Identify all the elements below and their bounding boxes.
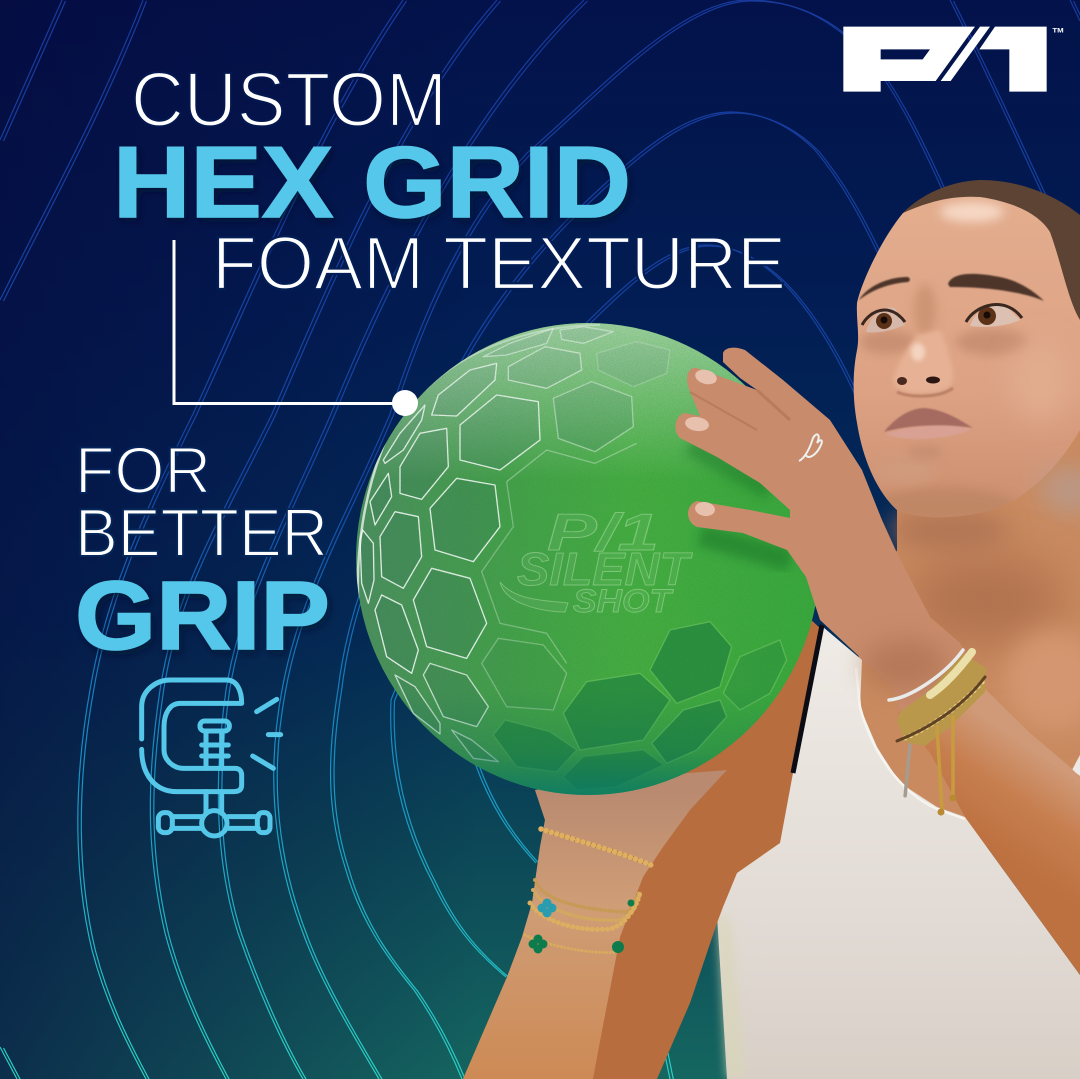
ball: embossed logo text: SHOT [573, 583, 674, 619]
ring [799, 434, 822, 461]
left eyebrow [859, 277, 910, 300]
clover charms [528, 898, 634, 954]
person: tank top [700, 627, 1080, 1079]
right eye [966, 304, 1022, 327]
person: torso and neck [850, 400, 1080, 860]
ball: Silent Shot hex grid foam ball [356, 323, 820, 795]
person: supporting arm [463, 600, 822, 1079]
bracelets on left wrist [525, 829, 651, 954]
title: custom hex grid foam texture [113, 57, 786, 305]
logo: P/1 [843, 27, 1064, 92]
ball: embossed logo text [500, 504, 693, 619]
title line: FOAM TEXTURE: FOAM TEXTURE [212, 221, 786, 305]
person: head and hair [854, 180, 1080, 523]
left eye [862, 307, 905, 333]
lips [884, 408, 973, 439]
connector end dot [392, 390, 418, 416]
icon: clamp [142, 680, 281, 836]
connector line to ball [174, 240, 395, 404]
fingernails [684, 367, 718, 517]
ball: embossed logo text: P/1 [547, 504, 659, 562]
title line: HEX GRID: HEX GRID [113, 127, 631, 239]
right eyebrow [948, 274, 1044, 301]
title line: CUSTOM: CUSTOM [131, 57, 447, 143]
bracelets on right wrist [889, 650, 986, 816]
subheading line: GRIP: GRIP [75, 561, 330, 670]
nose [893, 330, 953, 396]
subheading line: FOR: FOR [75, 433, 211, 507]
ball: embossed logo text: SILENT [517, 543, 693, 595]
hex grid pattern on ball [360, 327, 670, 762]
person: raised arm and hand [675, 348, 1080, 975]
logo: P/1: TM [1052, 28, 1064, 35]
raised dark hexes at bottom of ball [493, 622, 787, 790]
subheading line: BETTER: BETTER [75, 495, 328, 571]
subheading: for better grip [75, 433, 330, 670]
